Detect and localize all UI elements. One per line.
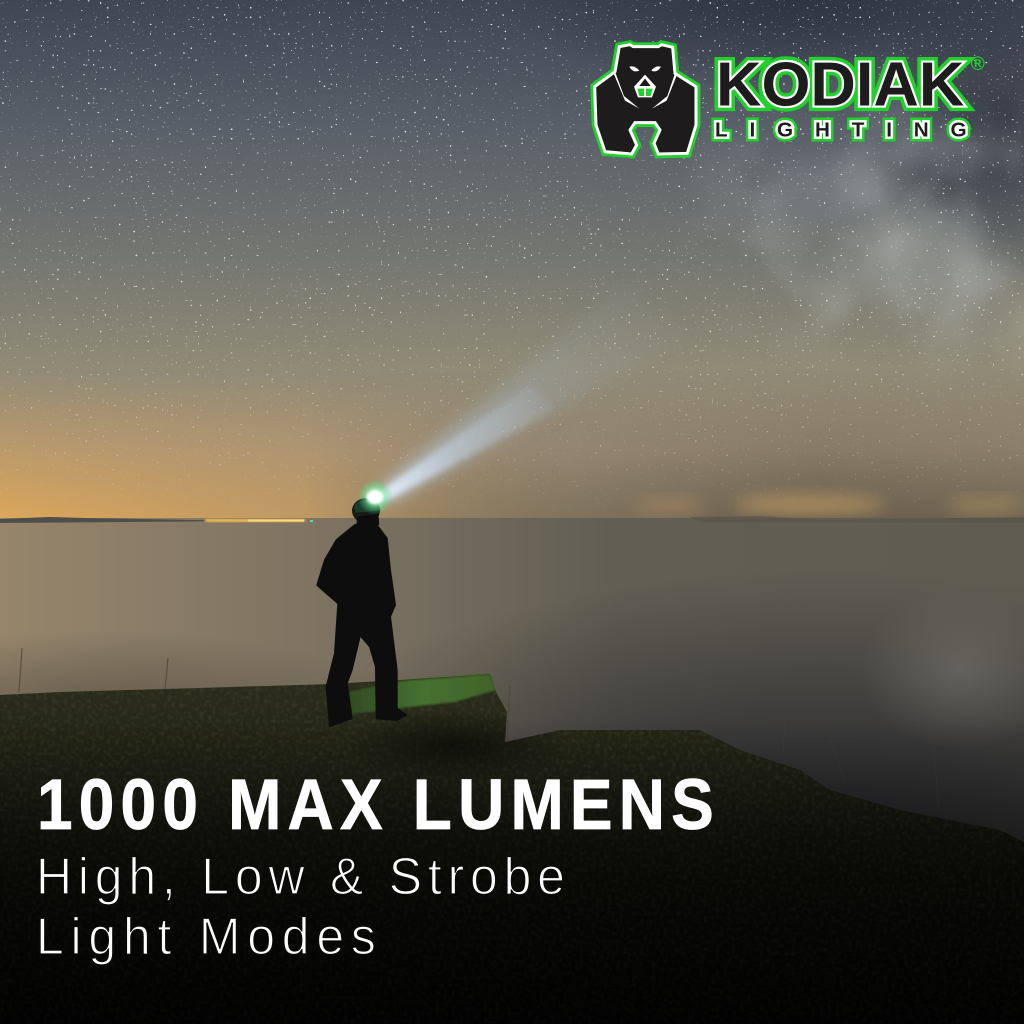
horizon glows xyxy=(635,495,1023,515)
grass stems xyxy=(19,648,939,810)
subheading: Light Modes xyxy=(36,907,376,965)
wordmark LIGHTING: LIGHTING xyxy=(715,119,967,142)
wordmark LIGHTING: LIGHTING xyxy=(715,119,967,142)
heading: 1000 MAX LUMENS xyxy=(37,766,714,845)
wordmark KODIAK: KODIAK xyxy=(716,50,965,119)
milky way xyxy=(720,100,1024,352)
logo: Kodiak Lighting xyxy=(595,45,985,154)
bear icon xyxy=(595,45,696,154)
distant shoreline and town lights xyxy=(0,516,1024,523)
subheading xyxy=(36,847,565,965)
illuminated green grass xyxy=(348,674,496,714)
subheading: High, Low & Strobe xyxy=(36,847,565,905)
wordmark KODIAK: KODIAK xyxy=(716,50,965,119)
light beam xyxy=(378,285,690,504)
person silhouette xyxy=(317,498,406,726)
darkening overlay for text xyxy=(0,720,1024,1024)
water xyxy=(0,518,1024,918)
sky background xyxy=(0,0,1024,520)
headlamp glow xyxy=(357,479,393,515)
registered mark: ® xyxy=(971,54,985,75)
wordmark LIGHTING: LIGHTING xyxy=(715,119,967,142)
foreground cliff xyxy=(0,670,1024,1024)
wordmark KODIAK: KODIAK xyxy=(716,50,965,119)
star field xyxy=(0,0,1024,520)
